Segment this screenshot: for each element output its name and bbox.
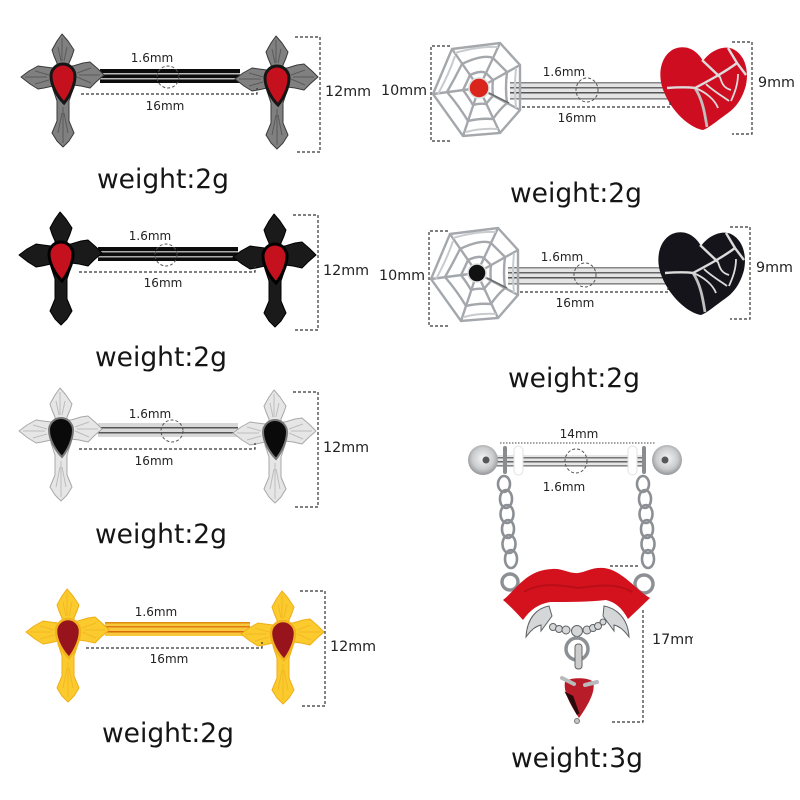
label: 1.6mm: 1.6mm [129,407,171,421]
label: 1.6mm: 1.6mm [543,480,585,494]
label: 1.6mm: 1.6mm [129,229,171,243]
weight label: weight:2g [95,519,227,550]
label: 9mm: 9mm [756,260,793,276]
barbell bar [100,69,240,83]
icon: spider web with red gem [433,43,520,136]
barbell bar [510,82,670,100]
label: 9mm: 9mm [758,75,795,91]
product: silver cross barbell [19,388,369,550]
icon: black heart with web [658,232,745,315]
label: 16mm: 16mm [556,296,594,310]
weight label: weight:2g [508,363,640,394]
icon: right silver cross with black gem [233,390,316,503]
icon: hanging red gem pendant [562,638,597,724]
barbell bar [105,622,250,636]
icon: spider web with black gem [431,228,518,321]
label: 14mm: 14mm [560,427,598,441]
label: 12mm: 12mm [323,263,369,279]
label: 1.6mm: 1.6mm [135,605,177,619]
weight label: weight:2g [97,164,229,195]
dimension lines [79,215,318,330]
label: 1.6mm: 1.6mm [543,65,585,79]
product: gold cross barbell [26,589,376,749]
weight label: weight:2g [102,718,234,749]
weight label: weight:2g [510,178,642,209]
icon: right black cross with red gem [233,214,316,327]
product: vampire lips chain barbell [468,427,698,774]
product: gunmetal cross barbell [21,34,371,195]
barbell bar [496,455,646,467]
label: 12mm: 12mm [323,440,369,456]
barbell bar [98,423,238,437]
weight label: weight:3g [511,743,643,774]
label: 17mm: 17mm [652,632,698,648]
dimension lines [81,37,320,152]
icon: left silver cross with black gem [19,388,102,501]
icon: fangs and beaded arc [526,606,629,637]
icon: left chain [498,476,518,590]
product: black cross barbell [19,212,369,373]
icon: left black cross with red gem [19,212,102,325]
label: 10mm: 10mm [379,268,425,284]
icon: white rings [514,446,637,475]
dimension lines [79,392,318,507]
barbell bar [98,247,238,261]
icon: right chain [635,476,654,593]
dimension lines [500,443,656,722]
icon: left gray cross with red gem [21,34,104,147]
label: 12mm: 12mm [325,84,371,100]
icon: red lips [503,568,650,620]
label: 16mm: 16mm [135,454,173,468]
label: 16mm: 16mm [144,276,182,290]
dimension lines [429,227,750,326]
label: 16mm: 16mm [558,111,596,125]
product: spider web and red heart barbell [381,42,795,209]
label: 10mm: 10mm [381,83,427,99]
icon: left gold cross with red gem [26,589,109,702]
label: 16mm: 16mm [150,652,188,666]
icon: steel balls [468,445,682,475]
product: spider web and black heart barbell [379,227,793,394]
icon: right gray cross with red gem [235,36,318,149]
weight label: weight:2g [95,342,227,373]
label: 16mm: 16mm [146,99,184,113]
label: 1.6mm: 1.6mm [131,51,173,65]
barbell bar [508,267,668,285]
label: 12mm: 12mm [330,639,376,655]
dimension lines [431,42,752,141]
label: 1.6mm: 1.6mm [541,250,583,264]
icon: right gold cross with red gem [241,591,324,704]
icon: red heart with web [660,47,747,130]
dimension lines [86,591,325,706]
